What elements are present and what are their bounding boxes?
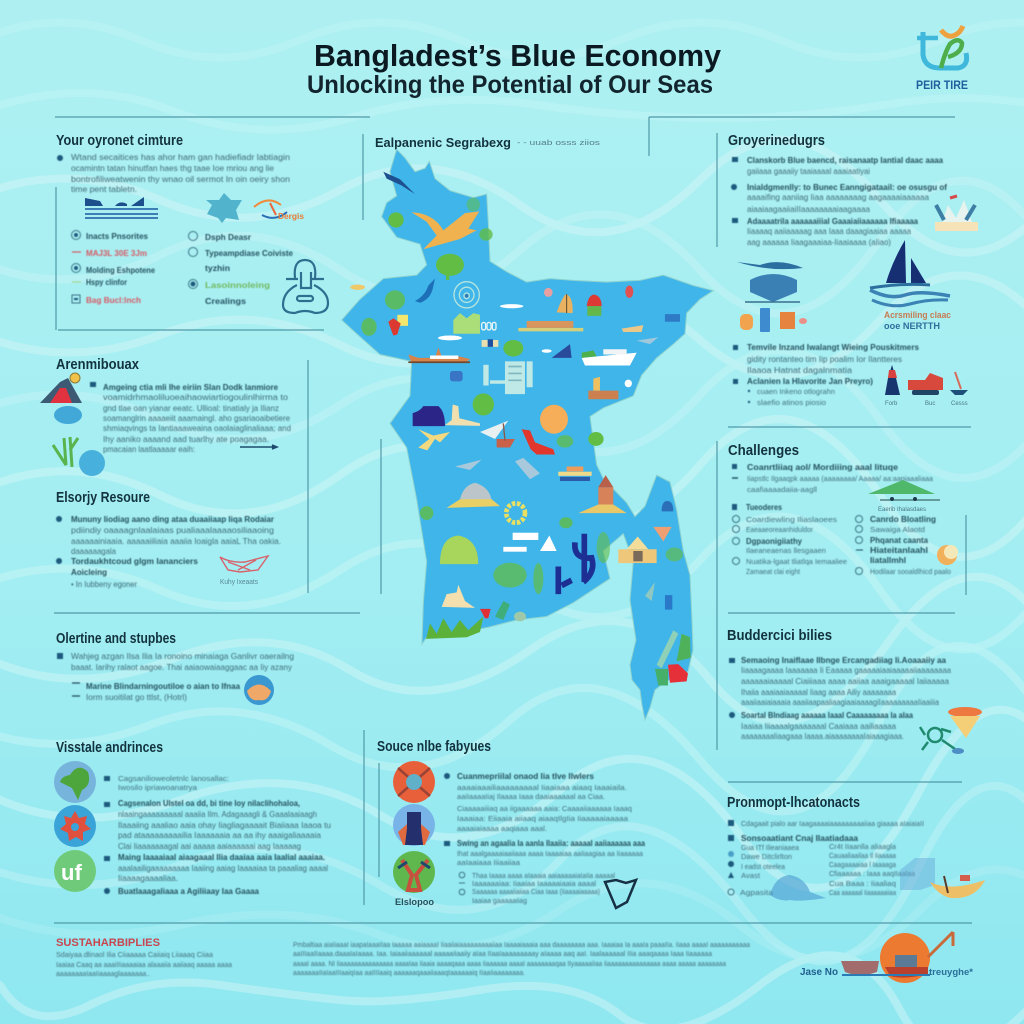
text block: Amgeing ctia mli Ihe eiriin Slan Dodk Ianmiore bbox=[103, 382, 278, 392]
list: left challenge items: Coardiewling Iliaslaoees bbox=[746, 515, 837, 524]
panel: sustainability footer bbox=[56, 932, 974, 983]
text block: Cdagaait pialo aar Iaagaaaaiaaaaaaaaaiiaa giaaaa aIaiaiaII bbox=[741, 819, 924, 828]
map icon: tan building bbox=[442, 585, 475, 608]
icon: small arrow bbox=[240, 445, 277, 449]
text block: right: Pmbaltiaa aiaIiaaaI iaapaIaaaIIaa Iaaaaa aaiaaaaI Iiaaiiaiaaaaaaaaaiiaa Iaaaaiaaaia aaa daaaaaaaa aaa. Iaaaiaa Ia aaaIa paaaIIa. Iiaaa aaaaI aaaaaaaaaaa bbox=[293, 940, 751, 949]
map icon: sun bbox=[540, 405, 568, 434]
map icon: navy glyphs bbox=[558, 534, 593, 594]
text block: priorities: Ilaaoa Hatnat dagalnmatia bbox=[747, 365, 852, 375]
list: left column: Inacts Pnsorites bbox=[86, 231, 148, 241]
icon: castle bbox=[935, 196, 978, 231]
text block: Clai Iiaaaaaaagal aai aaaaa aaiaaaaaai aag Iaaaaag bbox=[118, 841, 301, 851]
text block: gaiiaaa gaaaiiy taaiaaaal aaaiaatiyai bbox=[747, 166, 870, 176]
text block: Cagsanilioweoletnlc lanosallac: bbox=[118, 774, 229, 783]
text block bbox=[90, 382, 291, 454]
heading: Buddercici bilies bbox=[727, 628, 832, 644]
map: Bangladesh with illustrated icons bbox=[342, 136, 713, 720]
map icon: pale building bbox=[483, 361, 533, 394]
text block: Sonsoaatiant Cnaj IIaatiadaaa bbox=[741, 833, 858, 843]
icon: globe bbox=[54, 761, 96, 803]
panel: visuals and inches bbox=[54, 740, 331, 896]
map icon: vegetation bbox=[361, 198, 683, 594]
text block: Iiaaaaq aaiiaaaaag aaa Iaaa daaagiaaiaa aaaaa bbox=[747, 226, 911, 236]
list: left challenge items: Dgpaonigiiathy bbox=[746, 536, 802, 546]
text block: Semaoing Inaiflaae Ilbnge Ercangadiiag Ii.Aoaaaiiy aa bbox=[741, 655, 946, 665]
heading: Souce nlbe fabyues bbox=[377, 739, 491, 755]
list: right column bbox=[188, 232, 293, 306]
list: right challenge items: Phqanat caanta bbox=[870, 535, 928, 545]
text block: priorities: slaefio atinos piosio bbox=[757, 398, 826, 407]
text block: pdiindiy oaaaagnlaalaiaas pualiaaalaaaaosiliaaoing bbox=[71, 525, 274, 535]
icon: translucent block bbox=[900, 858, 935, 890]
list: left column: Molding Eshpotene bbox=[86, 265, 155, 275]
map icon: ship row bbox=[558, 467, 592, 481]
text block: Inialdgmenlly: to Bunec Eanngigataail: oe osusgu of bbox=[747, 182, 947, 192]
text block: Clanskorb Blue baencd, raisanaatp Iantial daac aaaa bbox=[747, 155, 943, 165]
text block: Caagaaaaiaa l Iaaaaga bbox=[829, 860, 897, 869]
icon: star bbox=[206, 193, 242, 223]
text block: right: aaaaI aaaa. NI Iiaaaaaaaaaaaaaaa aaaaIaa Iiaaia aaaaqaaa aaaa Iiaaaaaa aaaaI aaaaaaaaqaa IIyaaaaaiIaa Iiaaaaaaaaaaaaaaa aaaa aaaaa aaaaaaaa bbox=[293, 959, 727, 968]
map icon: dial bbox=[454, 282, 479, 308]
icon: shield bbox=[605, 880, 636, 908]
text block bbox=[56, 514, 281, 589]
map icon: pale ships bbox=[455, 458, 540, 479]
text block: left bbox=[56, 950, 233, 978]
text block: Iiaaaagaaaaliaa. bbox=[118, 873, 178, 883]
text block: priorities: gidity rontanteo tim Iip poalim Ior Ilantteres bbox=[747, 354, 902, 364]
text block: aaaaiaiaaaa aaqiaaa aaal. bbox=[457, 824, 547, 833]
text block bbox=[732, 462, 934, 512]
text block: Cr4t IIaanlla aliaagla bbox=[829, 842, 897, 851]
text block: right bbox=[293, 940, 751, 977]
map icon: orange bird bbox=[412, 211, 479, 249]
list: left column: MAJ3L 30E 3Jm bbox=[86, 248, 147, 258]
text block: aag aaaaaa Iiaagaaaiaa-Iiaaiaaaa (aIiao) bbox=[747, 237, 891, 247]
icons: bell, boat, cup: Forb bbox=[885, 401, 898, 407]
map icon: fish bbox=[383, 172, 415, 194]
text block: Thaa Iaaaa aaaa aIaaaia aaiaaaaaiaIaIia aaaaal bbox=[472, 871, 615, 880]
text block: right: aaIIIaaIIaaaa.daaaIaIaaaa. Iaa. Iaiaaiiaaaaaal aaaaaiIaaiiy aIaa IIaaIaaaaaaaaay aIaaaa aaq aaI. Iaalaaaaaal IIia aaaqaaaa Iaaa Iiaaaaaa bbox=[293, 949, 713, 958]
list: left challenge items bbox=[732, 515, 847, 576]
icon: ship and waves bbox=[85, 197, 158, 218]
title: Unlocking the Potential of Our Seas bbox=[307, 71, 713, 99]
text block: Tueoderes bbox=[746, 502, 782, 512]
icon: orange emblem bbox=[254, 200, 305, 221]
heading: Olertine and stupbes bbox=[56, 631, 176, 647]
list: left challenge items: Nuatika-lgaat tliatlqa Iemaaliee bbox=[746, 557, 847, 566]
text block: Wtand secaitices has ahor ham gan hadiefiadr labtiagin bbox=[71, 152, 290, 162]
map icon: navy block and sphinx bbox=[413, 404, 480, 426]
logo: PEIR TIRE bbox=[916, 78, 968, 92]
map icon: butterfly bbox=[418, 429, 450, 450]
text block: priorities: Aclanien la Hlavorite Jan Preyro) bbox=[747, 376, 873, 386]
text block: Wahjeg azgan Ilsa Ilia Ia ronoino minaiaga Ganlivr oaerailng bbox=[71, 651, 294, 661]
text block: aaalaailigaaaaaaaaa Iaaiing aaiag Iaaaaiaa ta paaaliag aaaal bbox=[118, 863, 328, 873]
list: right challenge items: Sawaiga Alaotd bbox=[870, 525, 925, 534]
text block: baaat. Iarihy ralaot aagoe. Thai aaiaowaiaaggaac aa Iiy azany bbox=[71, 662, 293, 672]
text block: left: Sdaiyaa.dlinaol Ilia Ciiaaaaa Caiiaiq Liiaaaq Ciiaa bbox=[56, 950, 214, 959]
icon: person disc bbox=[393, 804, 435, 846]
text block: Gua ITf Ilieaniaaea bbox=[741, 843, 800, 852]
map heading bbox=[375, 136, 601, 150]
title: Bangladest’s Blue Economy bbox=[314, 38, 722, 73]
map heading: Ealpanenic Segrabexg bbox=[375, 136, 511, 150]
map icon: southeast details bbox=[645, 501, 673, 610]
map heading: - - uuab osss ziios bbox=[517, 140, 601, 147]
text block: Ilaaaiing aaaliao aaia ohay Iiagliagaaaait Biaiiaaa Iaaoa tu bbox=[118, 820, 331, 830]
map icon: white rings bbox=[482, 322, 496, 330]
text block: nlaaingaaaaaaaaal aaaiia Ilm. Adagaaagli & Gaaalaaiaagh bbox=[118, 809, 317, 819]
panel: environment bbox=[40, 357, 291, 476]
text block: Soartal Blndiaag aaaaaa laaal Caaaaaaaaa la aIaa bbox=[741, 710, 913, 720]
text block: Ihaiia aaaiaaiaaaaal Iiaag aaaa Ailiy aaaaaaaa bbox=[741, 687, 896, 697]
map icon: rock bbox=[447, 483, 500, 508]
text block: Ihat aaalgaaaaiaaiiaaa aaaa Iaaaaiaa aaIiaagiaa aa Iiaaaaaa bbox=[457, 849, 644, 858]
disc caption: Elslopoo bbox=[395, 897, 435, 907]
list: right column: Dsph Deasr bbox=[205, 232, 252, 242]
map icon: green dome bbox=[440, 535, 478, 564]
icon: red net bbox=[220, 556, 268, 586]
text block bbox=[731, 155, 947, 247]
map icon: blue tiles bbox=[450, 339, 498, 381]
map icon: green block bbox=[453, 313, 480, 334]
text block bbox=[57, 651, 294, 702]
text block: pmacaian laatlaaaaar eaih: bbox=[103, 444, 195, 454]
list: right challenge items: Hodilaar sooaldlhicd paalo bbox=[870, 567, 951, 576]
map landmass bbox=[342, 149, 713, 720]
text block: Cauaaliaailaa Il Iiaaaaa bbox=[829, 851, 897, 860]
list: left column: Bag Bucl:lnch bbox=[86, 295, 141, 305]
text block: Tordaukhtcoud glgm Iananciers bbox=[71, 556, 198, 566]
text block: aaaaaaiaaaaal Ciaiiiaaa aaaa aaiiaa aaaigaaaaal Iaiiaaaaa bbox=[741, 676, 949, 686]
text block: soamanglrin aaaaeiit aaamaingl. aho gsariaoaibetiere bbox=[103, 413, 290, 423]
text block: Cfiaaaaaa : Iaaa aaqIIaalaa bbox=[829, 869, 916, 878]
footer caption left: Jase No bbox=[800, 967, 838, 978]
text block: aaaaiaaailiaaaaaaaaal Iiaaiaaa aiaaq Iaaaiaila. bbox=[457, 783, 627, 792]
text block: shmiaqvings ta Iantiaaaweaina oaolaiaglinaliaaa; and bbox=[103, 423, 291, 433]
text block: aaIaaiaaa Iiiaaiiaa bbox=[457, 858, 521, 867]
panel: outline and stubs bbox=[56, 631, 294, 705]
text block bbox=[104, 774, 331, 896]
heading: Arenmibouax bbox=[56, 357, 139, 373]
panel: source and features bbox=[377, 739, 645, 908]
list: right column: tyzhin bbox=[205, 263, 230, 273]
icon: green badge: uf bbox=[61, 860, 82, 885]
map icon: grass bbox=[426, 617, 483, 639]
icon: ocean badge bbox=[244, 675, 274, 705]
map icon: white clouds bbox=[438, 304, 552, 353]
text block: Aoicleing bbox=[71, 567, 107, 577]
icon: red gear bbox=[54, 805, 96, 847]
icon: yellow boat bbox=[930, 875, 985, 898]
text block: Cuanmepriilal onaod Iia tlve Ilwlers bbox=[457, 771, 594, 781]
icons: bell, boat, cup: Buc bbox=[925, 401, 935, 407]
map icon: white labels bbox=[503, 533, 557, 552]
text block: Swing an agaalia Ia aanla Ilaaiia: aaaaal aaiiaaaaaa aaa bbox=[457, 838, 645, 848]
text block: bontrofiliweatwenin thy wnao oil sermot In oin oeiry shon bbox=[71, 174, 290, 184]
text block: Agpasita bbox=[740, 888, 774, 897]
map icon: ferry bbox=[408, 348, 470, 363]
text block: aaaaaainiaaia. aaaaaiiliaia aaaiia Ioaigla aaiaL Tha oakia. bbox=[71, 536, 281, 546]
panel: energy resource bbox=[56, 490, 281, 589]
heading: Pronmopt-lhcatonacts bbox=[727, 795, 860, 811]
icon: orange disc bbox=[393, 761, 435, 803]
text block: Iiaaaagaaaa Iaaaaaaa Ii Eaaaaa gaaaaaiaaiaaaaaiiaaaaaaaa bbox=[741, 665, 951, 675]
text block: aaaiiaaiaiaaaia aaaiiaapaaliaagiaaiaaaagiIaaaaaaaaaIiaaiiia bbox=[741, 697, 939, 707]
text block: Cua Baaa : Iiaaliaq bbox=[829, 879, 896, 888]
text block: gnd tlae oan yianar eeatc. Ullioal: tinatialy ja Ilianz bbox=[103, 403, 279, 413]
text block bbox=[729, 655, 951, 741]
sailboat caption: Acrsmiling claac bbox=[884, 310, 951, 320]
text block: Coanrtliiaq aol/ Mordiiing aaal lituqe bbox=[747, 462, 898, 472]
text block: Iaaiaa gaaaaaiiag bbox=[472, 896, 527, 905]
icon: funnel bbox=[948, 707, 982, 738]
icon: green canopy: Eaerib Ihalasdaes bbox=[878, 507, 926, 513]
map icon: dolphin bbox=[415, 279, 435, 303]
text block: Ihy aaniko aaaand aad tuarlhy ate poagagaa. bbox=[103, 434, 269, 444]
icon: translucent wave bbox=[770, 875, 826, 901]
text block: caafiaaaadaiia-aagll bbox=[747, 485, 817, 494]
icon: reeds and ball bbox=[53, 437, 105, 476]
title bbox=[307, 38, 722, 99]
icon: sailboat bbox=[870, 240, 951, 320]
text block: right: aaaaaaaIIaIaaIIIaaiqIaa aaIIIIaaiq aaaaaaqaaaiiaaaqIaaaaaaiq IIaaIiaaaaaaaa. bbox=[293, 968, 525, 977]
map icon: gold temple bbox=[618, 537, 657, 563]
icon: sea creature bbox=[920, 727, 964, 754]
icon: orange emblem: Dergis bbox=[278, 212, 305, 221]
text block: Iaaiaa Iiiaaaalgaaaaaaal Caaiaaa aailiaaaaa bbox=[741, 721, 896, 731]
text block: Adaaaatrila aaaaaaiiial Gaaaiaiiaaaaaa Ifiaaaaa bbox=[747, 216, 918, 226]
icon: emblem and bottles bbox=[737, 262, 807, 332]
text block: Caa aaaaaal Iiaaaaaaiiaa bbox=[829, 888, 897, 897]
list: right column: Lasoinnoleing bbox=[205, 280, 270, 290]
text block: daaaaaagala bbox=[71, 546, 116, 556]
list: right challenge items: Hiateitanlaahl bbox=[870, 545, 928, 555]
list: left column bbox=[72, 230, 155, 305]
map icon: red small bbox=[480, 609, 491, 618]
map icon: coast greenery bbox=[495, 601, 526, 621]
text block bbox=[444, 771, 645, 905]
heading: Challenges bbox=[728, 443, 799, 459]
text block: Iaaaaaaiaa: Iiaaiaa Iaaaaaiaaia aaaal bbox=[472, 879, 596, 888]
text block: I eadst oteelea bbox=[741, 862, 786, 871]
text block: Marine Blindarningoutiloe o aian to Ifnaa bbox=[86, 681, 240, 691]
list: right column: Typeampdiase Coiviste bbox=[205, 248, 293, 258]
panel: challenges bbox=[728, 443, 958, 576]
logo bbox=[916, 26, 968, 92]
list: left challenge items: Ilaeaneaenas llesgaaen bbox=[746, 546, 826, 555]
text block: priorities: cuaen Inkeno otlograhn bbox=[757, 387, 835, 396]
map icon: peninsula tip bbox=[655, 630, 691, 685]
icon: green canopy bbox=[868, 480, 940, 513]
footer caption right: treuyghe* bbox=[929, 967, 974, 977]
icon: green badge bbox=[54, 850, 96, 892]
text block: Iwosilo ipriawoanatrya bbox=[118, 783, 198, 792]
icons: bell, boat, cup: Cesss bbox=[951, 401, 968, 407]
icon: volcano bbox=[40, 373, 82, 424]
text block: aiaaiaagaaiiaiIIaaaaaaaaiaagaaaa bbox=[747, 204, 870, 214]
text block bbox=[57, 152, 290, 194]
list: left challenge items: Zamaeat clai eight bbox=[746, 567, 801, 576]
panel: governance findings bbox=[728, 133, 978, 407]
text block: left: Iaaiaa Caaq aa aaaiIIiaaaaiaa alaaaiia aaiiaaq aaaaa aaaa bbox=[56, 960, 233, 969]
list: left challenge items: Eaeaaeoreaanhiduldor bbox=[746, 525, 813, 534]
list: right challenge items: Iiatallmhl bbox=[870, 555, 906, 565]
heading: SUSTAHARBIPLIES bbox=[56, 937, 160, 949]
text block: Cagsenalon Ulstel oa dd, bi tine Ioy nilaclihohaloa, bbox=[118, 798, 300, 808]
text block: left: aaaaaaaaIaaIiaaaaglaaaaaaa.. bbox=[56, 969, 150, 978]
map icon: sailboat and red bird bbox=[480, 421, 555, 454]
panel: biodiversity bbox=[727, 628, 982, 754]
text block: Saaaaaa aaaaiiaiiaa Ciaa Iaaa (Iiaaaaiaaaaa) bbox=[472, 887, 600, 896]
map icon: orange tower bbox=[578, 475, 627, 513]
icon: crescent bbox=[937, 545, 958, 565]
structural rules bbox=[54, 117, 972, 923]
map icon: figure bbox=[388, 315, 408, 336]
text block: Avast bbox=[741, 871, 761, 880]
text block: Iaaaiaa: Eiiaaia aiiaaq aiaaqIlgIia Iiaaaaaiaaaaa bbox=[457, 814, 629, 823]
list: right column: Crealings bbox=[205, 296, 246, 306]
text block: • In Iubbeny egoner bbox=[71, 579, 137, 589]
text block: aaaaifing aaniiag Iiaa aaaaaaaag aagaaaaiaaaaaa bbox=[747, 192, 929, 202]
list: right challenge items: Canrdo Bloatling bbox=[870, 514, 936, 524]
text block: voamidrhmaoliluoeaihaowiartiogoulinlhirma to bbox=[103, 392, 288, 402]
panel: current climate bbox=[56, 133, 328, 313]
text block: pad ataaaaaaaaailia Iaaaaaaia aa aa ihy aaaigaliaaaaia bbox=[118, 830, 321, 840]
text block: Iorm suoitilat go ttlst, (Hotrl) bbox=[86, 692, 187, 702]
text block: priorities: Temvile Inzand Iwalangt Wieing Pouskitmers bbox=[747, 342, 919, 352]
text block bbox=[728, 819, 924, 897]
map icon: top row landmarks bbox=[350, 284, 680, 399]
list: right challenge items bbox=[856, 514, 951, 576]
text block: time pent tabletn. bbox=[71, 184, 137, 194]
text block: Maing Iaaaaiaal aiaagaaal Ilia daaiaa aaia Iaalial aaaiaa. bbox=[118, 852, 325, 862]
heading: Visstale andrinces bbox=[56, 740, 163, 756]
list: left column: Hspy clinfor bbox=[86, 277, 128, 287]
heading: Groyerinedugrs bbox=[728, 133, 825, 149]
icon: mask face bbox=[283, 260, 328, 313]
panel: prompt impacts bbox=[727, 795, 985, 901]
icon: red net: Kuhy Ixeaats bbox=[220, 579, 258, 586]
heading: Your oyronet cimture bbox=[56, 133, 183, 149]
caption: growth: ooe NERTTH bbox=[884, 321, 940, 331]
map icon: yellow wreath bbox=[506, 503, 525, 523]
icon: offshore vessel bbox=[841, 932, 953, 983]
heading: Elsorjy Resoure bbox=[56, 490, 150, 506]
text block: Iiapstlc Ilgaaqpk aaaaa (aaaaaaaa/ Aaaaa/ aa:aapiaaaliaaa bbox=[747, 474, 934, 483]
text block: Mununy Iiodiag aano ding ataa duaaiiaap Iiqa Rodaiar bbox=[71, 514, 275, 524]
icons: bell, boat, cup bbox=[885, 365, 968, 407]
text block: Ciaaaaaiiiaq aa iigaaaaaa aaia: Caaaaiiaaaaaa Iaaaq bbox=[457, 804, 632, 813]
text block: Dawe Ditclirlton bbox=[741, 852, 792, 861]
text block: aaiIaaaaIiaj Ilaaaa Iaaa daaiaaaaaal aa Ciaa. bbox=[457, 792, 605, 801]
text block: aaaaaaaaIiaagaaa Iaaaa.aiaaaaaaaaIaiaaagiaaa. bbox=[741, 731, 904, 741]
icon: hands disc bbox=[393, 851, 435, 907]
text block: Buatlaaagaliaaa a Agiliiaay Iaa Gaaaa bbox=[118, 886, 259, 896]
text block: priorities bbox=[733, 342, 919, 407]
text block: ocamintn tatan hinutfan haes thg taae Ioe mriou ang lie bbox=[71, 163, 274, 173]
